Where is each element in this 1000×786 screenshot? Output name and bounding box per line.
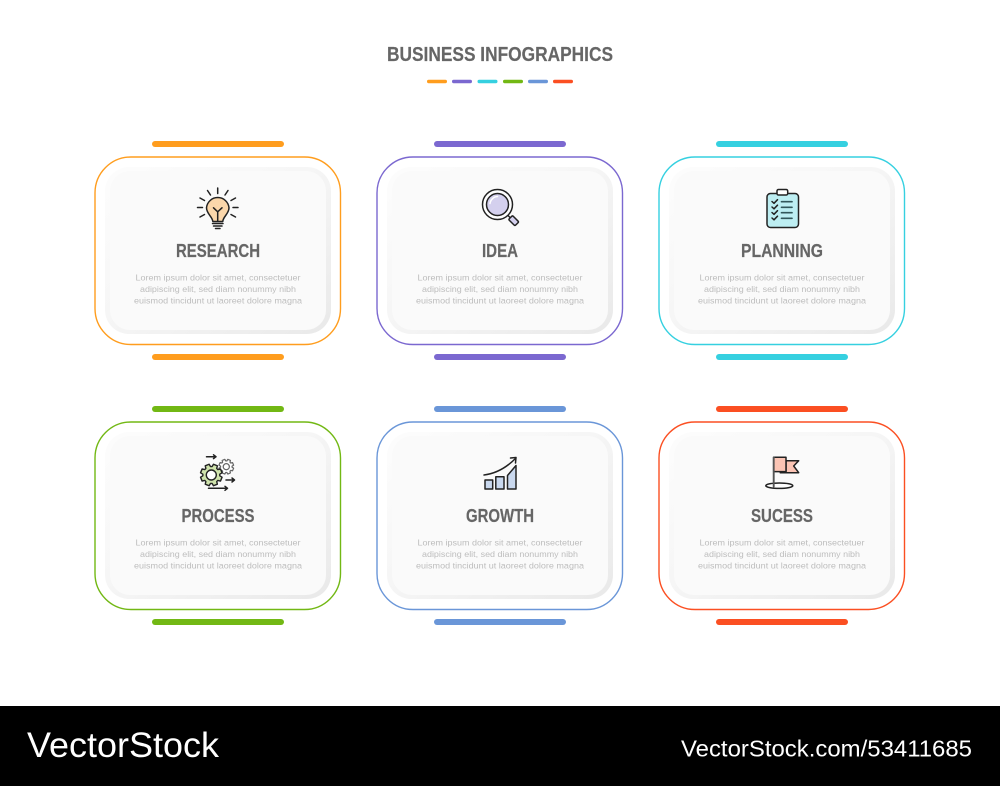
text: growth description: adipiscing elit, sed diam nonummy nibh — [422, 549, 578, 559]
panel: research — [95, 141, 340, 360]
heading: sucess: SUCESS — [751, 506, 813, 526]
text: idea description — [416, 272, 584, 306]
footer logo text: VectorStock — [27, 726, 220, 765]
title: BUSINESS INFOGRAPHICS — [387, 44, 613, 66]
text: sucess description: euismod tincidunt ut laoreet dolore magna — [698, 560, 866, 570]
text: growth description: euismod tincidunt ut laoreet dolore magna — [416, 560, 584, 570]
panel: sucess — [659, 406, 904, 625]
text: sucess description — [698, 538, 866, 570]
text: research description: Lorem ipsum dolor sit amet, consectetuer — [136, 272, 301, 282]
text: planning description: adipiscing elit, sed diam nonummy nibh — [704, 284, 860, 294]
text: research description: adipiscing elit, sed diam nonummy nibh — [140, 284, 296, 294]
text: planning description: Lorem ipsum dolor sit amet, consectetuer — [700, 272, 865, 282]
footer band — [0, 706, 1000, 786]
text: process description: Lorem ipsum dolor sit amet, consectetuer — [136, 538, 301, 548]
title colour dashes — [427, 80, 573, 83]
icon: growth chart — [484, 458, 516, 489]
panel: idea — [377, 141, 622, 360]
text: idea description: Lorem ipsum dolor sit amet, consectetuer — [418, 272, 583, 282]
text: process description: adipiscing elit, sed diam nonummy nibh — [140, 549, 296, 559]
text: growth description — [416, 538, 584, 570]
text: process description: euismod tincidunt ut laoreet dolore magna — [134, 560, 302, 570]
heading: process: PROCESS — [182, 506, 254, 526]
icon: flag on hole — [766, 457, 799, 488]
icon: gears and arrows — [201, 455, 234, 490]
footer image id: VectorStock.com/53411685 — [681, 736, 972, 762]
text: idea description: euismod tincidunt ut laoreet dolore magna — [416, 296, 584, 306]
heading: research: RESEARCH — [176, 241, 260, 261]
text: process description — [134, 538, 302, 570]
heading: growth: GROWTH — [466, 506, 534, 526]
panel: growth — [377, 406, 622, 625]
panel: process — [95, 406, 340, 625]
icon: light bulb — [198, 188, 238, 228]
text: planning description — [698, 272, 866, 306]
text: sucess description: Lorem ipsum dolor sit amet, consectetuer — [700, 538, 865, 548]
heading: idea: IDEA — [482, 241, 518, 261]
panel: planning — [659, 141, 904, 360]
icon: magnifying glass — [482, 190, 519, 226]
text: research description — [134, 272, 302, 306]
text: sucess description: adipiscing elit, sed diam nonummy nibh — [704, 549, 860, 559]
text: growth description: Lorem ipsum dolor sit amet, consectetuer — [418, 538, 583, 548]
text: research description: euismod tincidunt ut laoreet dolore magna — [134, 296, 302, 306]
text: planning description: euismod tincidunt ut laoreet dolore magna — [698, 296, 866, 306]
text: idea description: adipiscing elit, sed diam nonummy nibh — [422, 284, 578, 294]
icon: clipboard checklist — [767, 190, 798, 228]
heading: planning: PLANNING — [741, 241, 823, 261]
